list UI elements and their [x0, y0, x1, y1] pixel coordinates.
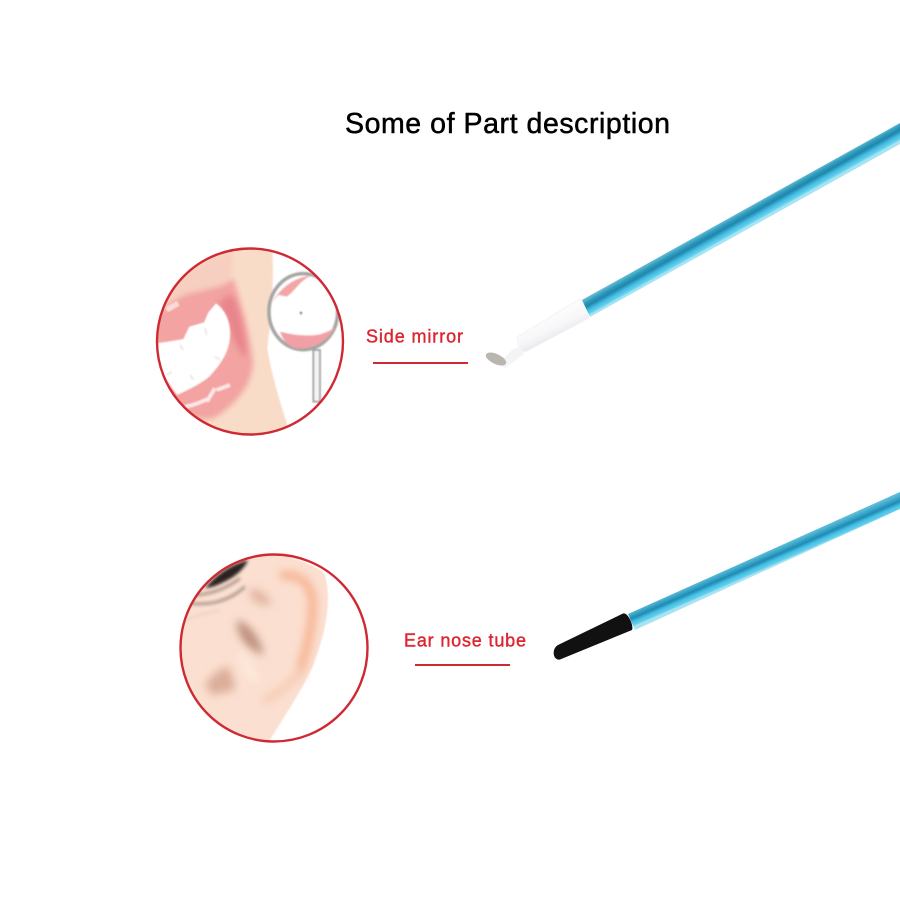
blue tube — [582, 123, 900, 317]
underline: side mirror — [373, 362, 468, 364]
panel: side mirror photo circle — [156, 247, 344, 436]
black tip — [554, 613, 632, 660]
tragus shadow — [205, 667, 235, 695]
title: Some of Part description — [345, 108, 670, 140]
antihelix shading — [248, 589, 272, 605]
blue tube — [628, 492, 900, 630]
stem — [498, 346, 524, 368]
tooth gaps — [167, 328, 220, 380]
panel: ear photo circle — [179, 553, 369, 743]
white sleeve — [517, 299, 589, 352]
lips — [153, 278, 253, 419]
hair — [205, 560, 248, 588]
concha bright — [246, 666, 254, 676]
teeth — [156, 303, 230, 407]
underline: ear nose tube — [415, 664, 510, 666]
mirror rim and face — [269, 274, 338, 402]
mirror handle — [313, 350, 320, 402]
label: side mirror: Side mirror — [366, 326, 463, 346]
concha shadow — [237, 620, 264, 655]
lower lip highlights — [185, 385, 230, 407]
skin — [182, 556, 328, 740]
lower ear shading — [263, 668, 302, 702]
mouth interior shadow — [218, 295, 246, 358]
skin — [158, 250, 288, 434]
helix rim shading — [280, 575, 313, 677]
mirror tip — [484, 350, 508, 368]
upper skin tone — [167, 252, 232, 303]
instrument: side mirror tube — [484, 123, 900, 368]
label: ear nose tube: Ear nose tube — [404, 630, 526, 650]
instrument: ear nose tube — [554, 492, 900, 660]
